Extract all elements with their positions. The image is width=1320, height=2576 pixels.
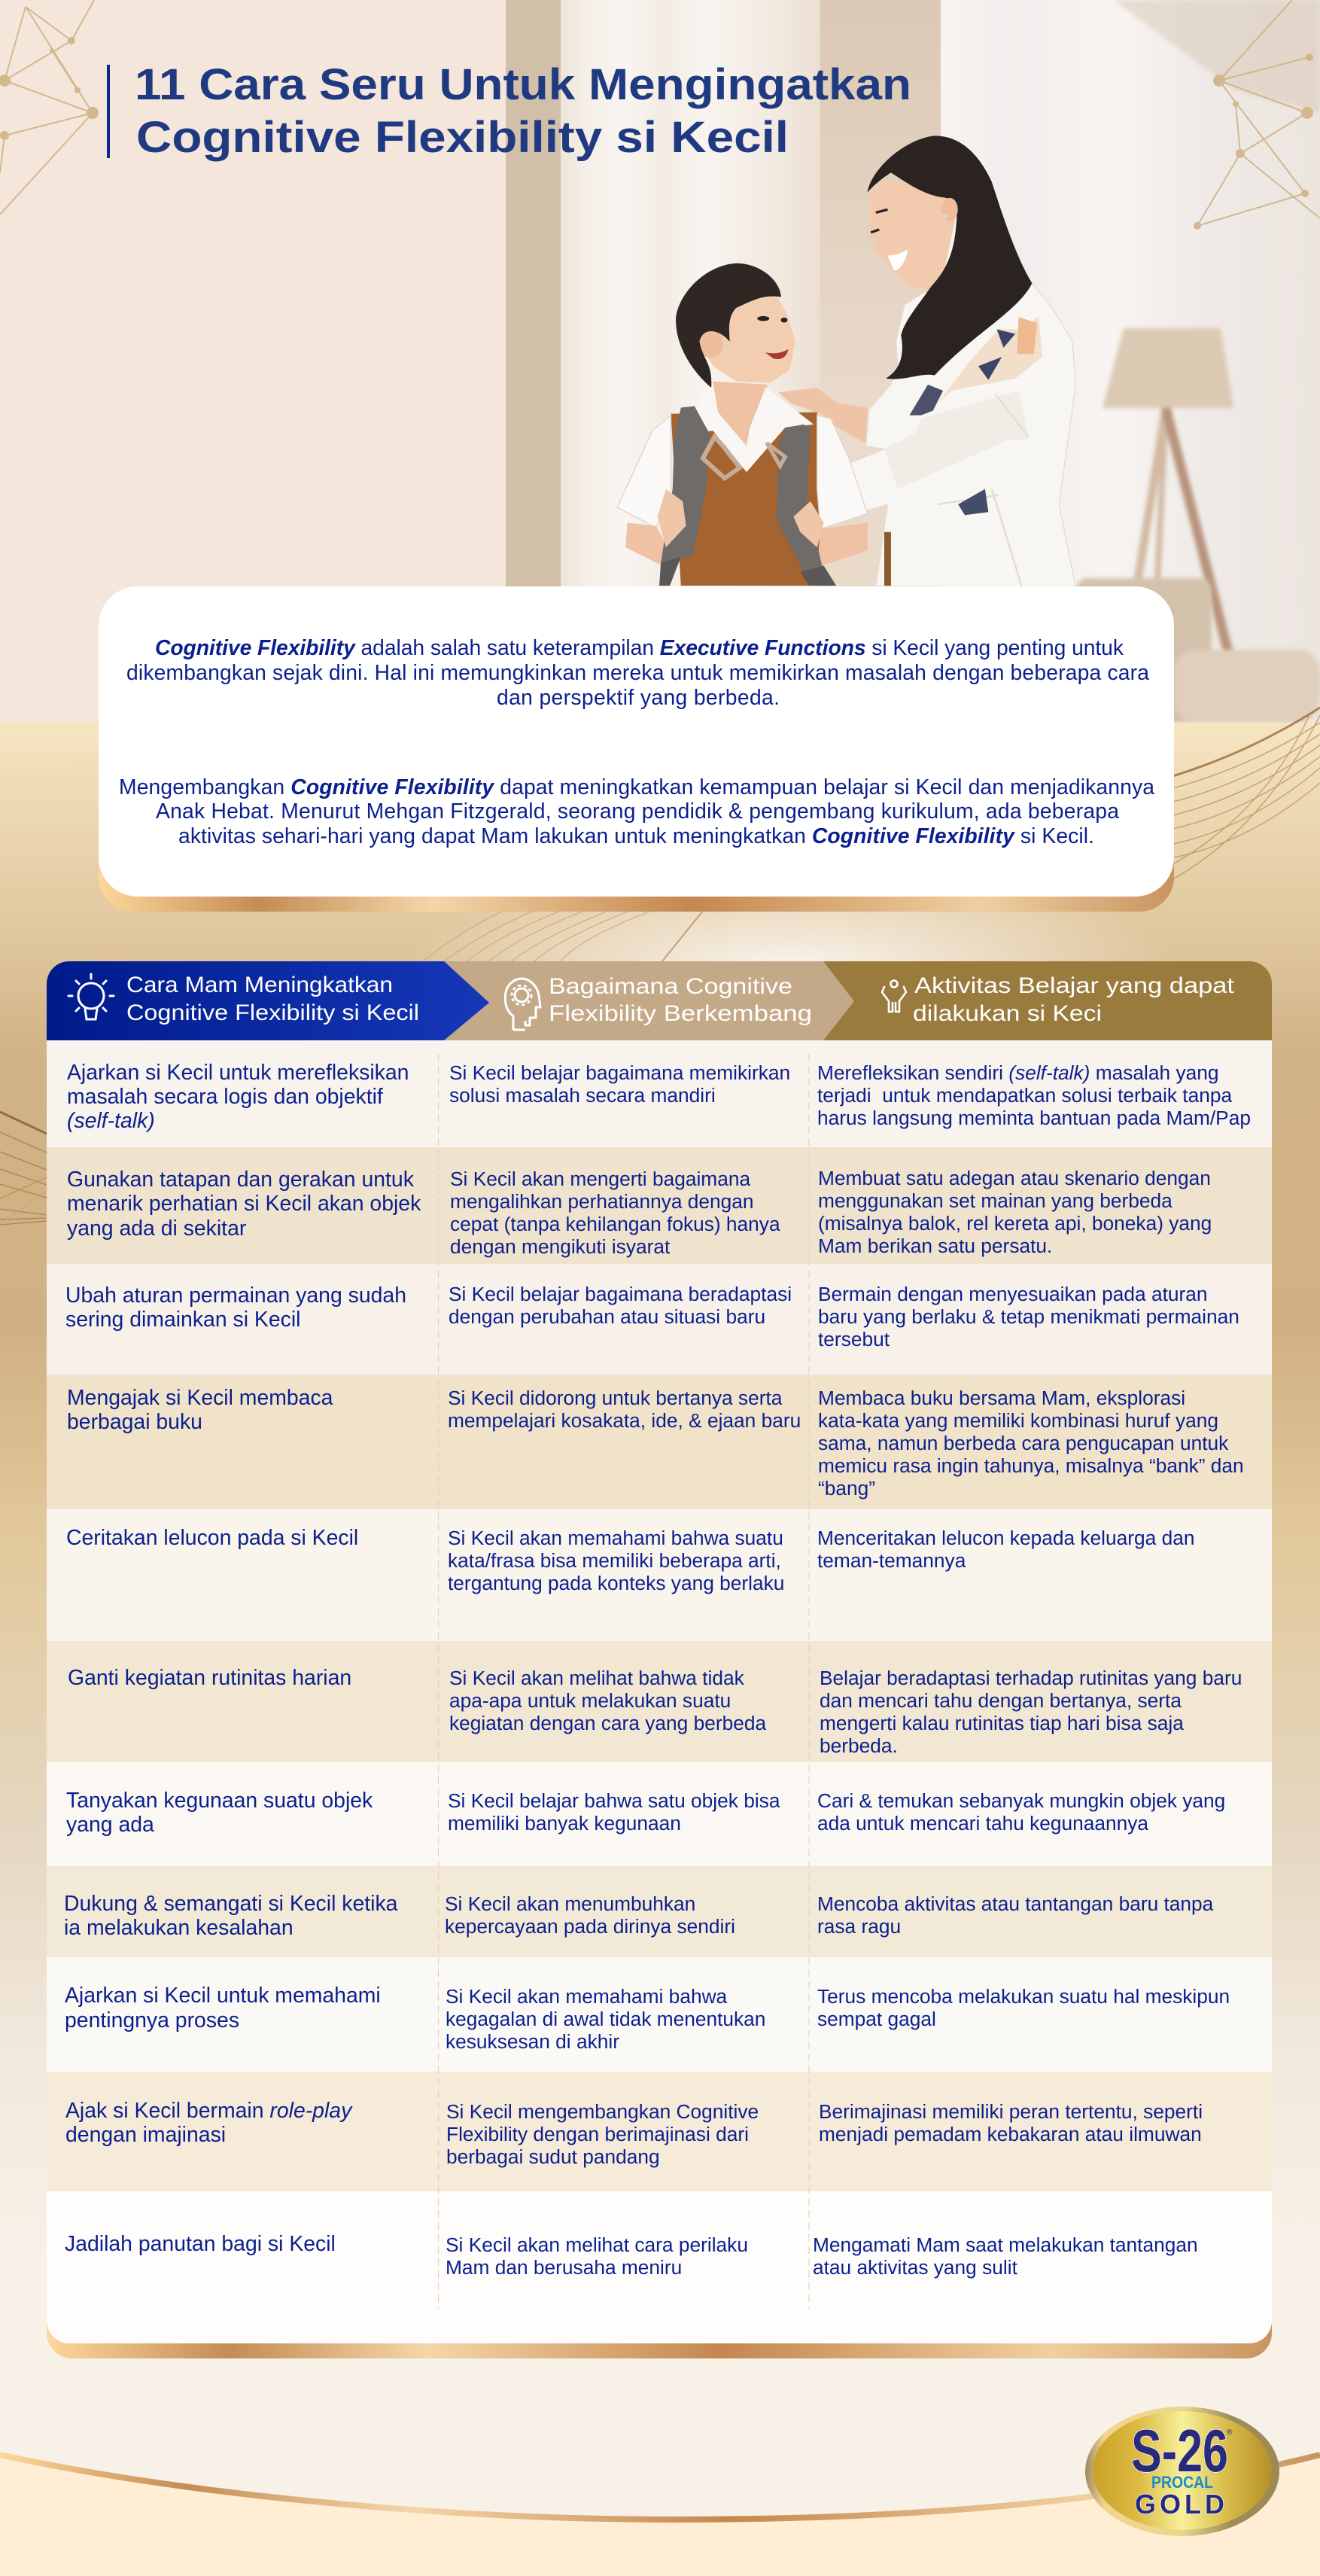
table row 3 xyxy=(47,1264,1272,1375)
row 11 column 3: Mengamati Mam saat melakukan tantangan xyxy=(813,2233,1198,2256)
table row 8 xyxy=(47,1866,1272,1957)
photo: mother and son xyxy=(617,135,1075,587)
icon: light bulb xyxy=(68,974,114,1019)
logo wordmark S-26: S-26 xyxy=(1131,2417,1228,2484)
row 3 column 2: dengan perubahan atau situasi baru xyxy=(449,1305,765,1328)
row 2 column 2: mengalihkan perhatiannya dengan xyxy=(450,1190,754,1213)
row 2 column 2: cepat (tanpa kehilangan fokus) hanya xyxy=(450,1213,780,1235)
row 1 column 1: Ajarkan si Kecil untuk merefleksikan xyxy=(67,1061,409,1085)
row 9 column 2: kegagalan di awal tidak menentukan xyxy=(446,2008,765,2030)
row 1 column 1: (self-talk) xyxy=(67,1109,155,1133)
row 4 column 1: berbagai buku xyxy=(67,1410,202,1434)
row 8 column 1: Dukung & semangati si Kecil ketika xyxy=(64,1892,398,1916)
logo PROCAL: PROCAL xyxy=(1151,2473,1213,2492)
row 10 column 2: Flexibility dengan berimajinasi dari xyxy=(446,2123,749,2145)
wave lines above table xyxy=(423,896,715,961)
row 4 column 2: mempelajari kosakata, ide, & ejaan baru xyxy=(448,1409,801,1432)
header text column 1: Cara Mam Meningkatkan xyxy=(126,973,393,997)
header text column 2: Flexibility Berkembang xyxy=(549,1001,812,1026)
row 10 column 3: Berimajinasi memiliki peran tertentu, seperti xyxy=(819,2100,1203,2123)
row 11 column 1: Jadilah panutan bagi si Kecil xyxy=(65,2232,336,2256)
row 2 column 1: Gunakan tatapan dan gerakan untuk xyxy=(67,1168,415,1192)
row 6 column 2: Si Kecil akan melihat bahwa tidak xyxy=(449,1667,745,1689)
header text column 1: Cognitive Flexibility si Kecil xyxy=(126,1000,419,1025)
row 6 column 3: berbeda. xyxy=(820,1734,898,1757)
row 8 column 3: rasa ragu xyxy=(817,1915,901,1938)
icon: head with gear xyxy=(505,979,540,1030)
row 2 column 2: Si Kecil akan mengerti bagaimana xyxy=(450,1168,750,1190)
table gold bottom edge xyxy=(47,2108,1272,2358)
intro paragraph 1: dan perspektif yang berbeda. xyxy=(497,685,780,709)
table row 10 xyxy=(47,2072,1272,2191)
row 7 column 3: ada untuk mencari tahu kegunaannya xyxy=(817,1812,1148,1835)
panel gold edge xyxy=(99,602,1174,912)
row 1 column 3: terjadi untuk mendapatkan solusi terbaik tanpa xyxy=(817,1084,1232,1107)
row 6 column 3: Belajar beradaptasi terhadap rutinitas yang baru xyxy=(820,1667,1242,1689)
row 3 column 1: sering dimainkan si Kecil xyxy=(65,1308,300,1332)
row 4 column 3: “bang” xyxy=(818,1477,875,1500)
header text column 2: Bagaimana Cognitive xyxy=(549,974,792,999)
row 7 column 1: Tanyakan kegunaan suatu objek xyxy=(66,1789,373,1813)
row 7 column 1: yang ada xyxy=(66,1813,154,1837)
table row 6 xyxy=(47,1641,1272,1762)
row 8 column 2: Si Kecil akan menumbuhkan xyxy=(445,1892,695,1915)
row 3 column 3: Bermain dengan menyesuaikan pada aturan xyxy=(818,1283,1208,1305)
photo background: room xyxy=(0,0,1320,723)
row 5 column 3: Menceritakan lelucon kepada keluarga dan xyxy=(817,1527,1194,1549)
intro paragraph 1: Cognitive Flexibility adalah salah satu keterampilan Executive Functions si Kecil yang penting untuk xyxy=(155,635,1124,659)
row 4 column 3: Membaca buku bersama Mam, eksplorasi xyxy=(818,1387,1185,1409)
row 6 column 1: Ganti kegiatan rutinitas harian xyxy=(68,1666,351,1690)
header: column 3 xyxy=(790,961,1272,1040)
table header xyxy=(47,961,1272,1040)
accent bar beside title xyxy=(107,65,110,158)
header: column 1 arrow xyxy=(47,961,489,1040)
row 8 column 1: ia melakukan kesalahan xyxy=(64,1916,294,1940)
panel: intro xyxy=(99,586,1174,912)
intro paragraph 2: Mengembangkan Cognitive Flexibility dapat meningkatkan kemampuan belajar si Kecil dan menjadikannya xyxy=(119,775,1154,799)
title: 11 Cara Seru Untuk Mengingatkan xyxy=(135,60,911,109)
row 11 column 2: Mam dan berusaha meniru xyxy=(446,2256,682,2279)
logo GOLD: GOLD xyxy=(1135,2489,1224,2520)
row 2 column 1: yang ada di sekitar xyxy=(67,1216,246,1241)
row 2 column 3: menggunakan set mainan yang berbeda xyxy=(818,1189,1172,1212)
row 8 column 3: Mencoba aktivitas atau tantangan baru tanpa xyxy=(817,1892,1214,1915)
table row 9 xyxy=(47,1957,1272,2072)
logo: S-26 Procal Gold xyxy=(1085,2407,1279,2536)
header text column 3: Aktivitas Belajar yang dapat xyxy=(914,973,1235,998)
row 7 column 2: Si Kecil belajar bahwa satu objek bisa xyxy=(448,1789,780,1812)
row 1 column 2: solusi masalah secara mandiri xyxy=(449,1084,716,1107)
row 4 column 2: Si Kecil didorong untuk bertanya serta xyxy=(448,1387,783,1409)
title: Cognitive Flexibility si Kecil xyxy=(136,113,789,162)
lamp xyxy=(1103,328,1233,655)
row 10 column 3: menjadi pemadam kebakaran atau ilmuwan xyxy=(819,2123,1202,2145)
wave lines left of table xyxy=(0,1112,47,1225)
row 5 column 2: kata/frasa bisa memiliki beberapa arti, xyxy=(448,1549,781,1572)
row 4 column 3: memicu rasa ingin tahunya, misalnya “bank” dan xyxy=(818,1454,1244,1477)
row 4 column 3: sama, namun berbeda cara pengucapan untuk xyxy=(818,1432,1229,1454)
row 8 column 2: kepercayaan pada dirinya sendiri xyxy=(445,1915,735,1938)
intro paragraph 2: aktivitas sehari-hari yang dapat Mam lakukan untuk meningkatkan Cognitive Flexibility si Kecil. xyxy=(178,824,1094,848)
row 9 column 3: sempat gagal xyxy=(817,2008,936,2030)
row 9 column 2: Si Kecil akan memahami bahwa xyxy=(446,1985,728,2008)
row 9 column 3: Terus mencoba melakukan suatu hal meskipun xyxy=(817,1985,1230,2008)
row 9 column 2: kesuksesan di akhir xyxy=(446,2030,619,2053)
row 4 column 3: kata-kata yang memiliki kombinasi huruf yang xyxy=(818,1409,1218,1432)
row 5 column 1: Ceritakan lelucon pada si Kecil xyxy=(66,1526,358,1550)
table row 4 xyxy=(47,1375,1272,1509)
wave lines right of intro panel xyxy=(1170,708,1320,881)
mother xyxy=(778,135,1076,586)
intro paragraph 1: dikembangkan sejak dini. Hal ini memungkinkan mereka untuk memikirkan masalah dengan beberapa cara xyxy=(126,660,1149,684)
row 5 column 2: Si Kecil akan memahami bahwa suatu xyxy=(448,1527,783,1549)
row 6 column 3: mengerti kalau rutinitas tiap hari bisa saja xyxy=(820,1712,1184,1734)
row 11 column 3: atau aktivitas yang sulit xyxy=(813,2256,1018,2279)
table row 1 xyxy=(47,1040,1272,1147)
panel white card xyxy=(99,586,1174,897)
table row 5 xyxy=(47,1509,1272,1641)
row 1 column 3: Merefleksikan sendiri (self-talk) masalah yang xyxy=(817,1061,1218,1084)
row 5 column 3: teman-temannya xyxy=(817,1549,966,1572)
row 10 column 2: berbagai sudut pandang xyxy=(446,2145,660,2168)
son xyxy=(617,263,868,587)
row 11 column 2: Si Kecil akan melihat cara perilaku xyxy=(446,2233,748,2256)
row 6 column 2: apa-apa untuk melakukan suatu xyxy=(449,1689,731,1712)
row 1 column 2: Si Kecil belajar bagaimana memikirkan xyxy=(449,1061,790,1084)
row 9 column 1: pentingnya proses xyxy=(65,2008,239,2032)
row 10 column 2: Si Kecil mengembangkan Cognitive xyxy=(446,2100,759,2123)
row 9 column 1: Ajarkan si Kecil untuk memahami xyxy=(65,1984,381,2008)
icon: person with raised arms xyxy=(882,980,906,1012)
bottom cream area with gold curve xyxy=(0,2455,1320,2576)
intro paragraph 2: Anak Hebat. Menurut Mehgan Fitzgerald, seorang pendidik & pengembang kurikulum, ada beberapa xyxy=(156,799,1119,823)
row 7 column 2: memiliki banyak kegunaan xyxy=(448,1812,681,1835)
row 1 column 3: harus langsung meminta bantuan pada Mam/Pap xyxy=(817,1107,1251,1129)
table row 2 xyxy=(47,1147,1272,1264)
logo registered mark: ® xyxy=(1227,2428,1233,2437)
header: column 2 arrow xyxy=(421,961,854,1040)
table row 7 xyxy=(47,1762,1272,1866)
row 3 column 1: Ubah aturan permainan yang sudah xyxy=(65,1283,406,1308)
row 10 column 1: Ajak si Kecil bermain role-play xyxy=(65,2099,351,2123)
header text column 3: dilakukan si Keci xyxy=(913,1001,1102,1026)
row 4 column 1: Mengajak si Kecil membaca xyxy=(67,1386,333,1410)
soft glow behind table xyxy=(376,851,1204,1076)
row 2 column 1: menarik perhatian si Kecil akan objek xyxy=(67,1192,421,1216)
row 5 column 2: tergantung pada konteks yang berlaku xyxy=(448,1572,784,1594)
row 3 column 2: Si Kecil belajar bagaimana beradaptasi xyxy=(449,1283,792,1305)
sofa xyxy=(1076,578,1320,723)
table row 11 xyxy=(47,2191,1272,2343)
decorative network: top right xyxy=(1194,0,1320,230)
row 6 column 3: dan mencari tahu dengan bertanya, serta xyxy=(820,1689,1182,1712)
row 2 column 3: Mam berikan satu persatu. xyxy=(818,1235,1052,1257)
decorative network: top left xyxy=(0,0,99,215)
row 2 column 3: (misalnya balok, rel kereta api, boneka) yang xyxy=(818,1212,1212,1235)
row 1 column 1: masalah secara logis dan objektif xyxy=(67,1085,383,1109)
row 2 column 3: Membuat satu adegan atau skenario dengan xyxy=(818,1167,1211,1189)
row 7 column 3: Cari & temukan sebanyak mungkin objek yang xyxy=(817,1789,1225,1812)
row 3 column 3: tersebut xyxy=(818,1328,890,1350)
row 2 column 2: dengan mengikuti isyarat xyxy=(450,1235,671,1258)
row 3 column 3: baru yang berlaku & tetap menikmati permainan xyxy=(818,1305,1239,1328)
row 10 column 1: dengan imajinasi xyxy=(65,2123,226,2147)
row 6 column 2: kegiatan dengan cara yang berbeda xyxy=(449,1712,766,1734)
